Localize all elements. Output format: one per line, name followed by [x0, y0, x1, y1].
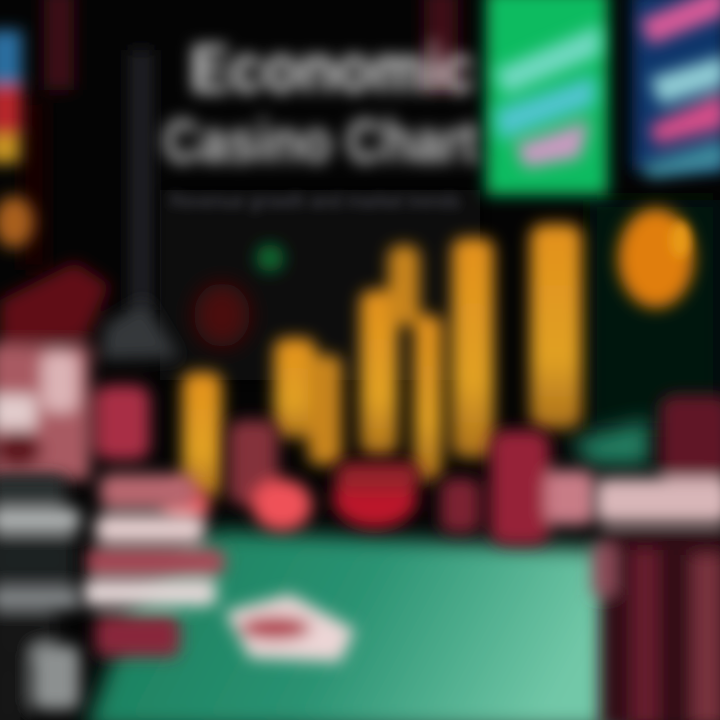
- green screen panel: [486, 0, 608, 195]
- background: red and grey vertical stripes: [20, 0, 458, 310]
- title: Economic: [190, 31, 475, 107]
- title: [163, 31, 478, 175]
- left edge screen: [0, 30, 34, 248]
- subtitle: Revenue growth and market trends: [170, 191, 460, 213]
- right foreground chip stack: [592, 395, 720, 720]
- pink striped screen panel: [632, 0, 720, 178]
- table felt: [85, 420, 650, 720]
- title: Casino Chart: [163, 108, 478, 175]
- orange coin: [618, 208, 694, 308]
- left red and white chip stack: [0, 262, 355, 662]
- red casino chips row: [162, 420, 595, 545]
- bar chart: golden columns: [182, 224, 582, 497]
- small green and red indicators: [194, 244, 284, 347]
- left black and grey chip stack: [0, 475, 80, 720]
